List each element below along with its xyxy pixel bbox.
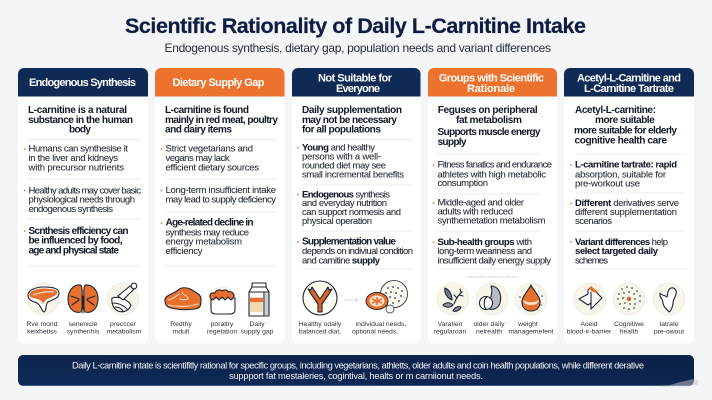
icon labels: blood-ir-barrier — [567, 328, 612, 336]
icon labels: health — [620, 328, 638, 336]
panel heading: Groups with Scientific — [439, 72, 544, 84]
panel heading — [564, 68, 694, 96]
intro text: for all populations — [302, 125, 381, 136]
intro text: Acetyl-L-carnitine: — [575, 105, 656, 116]
icon labels — [299, 321, 406, 336]
bullet list: in the liver and kidneys — [28, 153, 118, 164]
intro text: supply — [438, 137, 467, 148]
bullet list: Scnthesis efficiency can — [28, 226, 128, 237]
bullet list: persons with a well- — [302, 152, 381, 162]
intro text: more suitable — [595, 115, 655, 126]
panel heading: Dietary Supply Gap — [172, 77, 265, 89]
icon: steak — [27, 283, 59, 315]
panel heading: Rationale — [467, 83, 515, 95]
icon labels: optional needs, — [352, 328, 398, 336]
bullet list: be influenced by food, — [28, 236, 123, 246]
bullet list: Different derivatives serve — [575, 198, 679, 209]
panel heading — [292, 68, 420, 96]
bullet list: synthesis may reduce — [166, 227, 249, 238]
icon: individual needs — [366, 280, 408, 313]
bullet list: scenarios — [575, 216, 612, 227]
icon: balanced diet — [303, 281, 337, 315]
intro text: substance in the human — [28, 115, 133, 126]
icon: older adult — [476, 283, 508, 315]
icon labels: metabolism — [107, 328, 142, 336]
bullet list: age and physical state — [28, 245, 119, 256]
bullet list: efficient dietary sources — [166, 163, 259, 174]
icon labels: balanced diat, — [299, 328, 341, 336]
arrow — [344, 298, 358, 302]
panel: dietary supply gap — [155, 68, 284, 344]
icon labels: pre-owout — [654, 328, 684, 336]
icon labels: supply gap — [241, 328, 274, 336]
bullet list: physiological needs through — [28, 195, 135, 206]
bullet list: Middle-aged and older — [438, 197, 524, 208]
bullet list — [433, 160, 552, 266]
bullet list: with precursor nutrients — [28, 163, 124, 174]
bullet list: select targeted daily — [575, 246, 659, 257]
bullet list: long-term weariness and — [438, 246, 532, 257]
intro text: Feguses on peripheral — [438, 105, 538, 116]
bullet list: rounded diet may see — [302, 160, 386, 171]
bullet list: may lead to supply deficiency — [166, 195, 276, 206]
icon labels: weight — [517, 321, 538, 328]
bullet list: vegans may lack — [166, 153, 230, 164]
intro text — [438, 105, 541, 148]
icon labels: precccer — [110, 321, 137, 328]
bullet list: schemes — [575, 255, 608, 266]
panel: acetyl-l-carnitine and tartrate — [564, 68, 694, 344]
subtitle: Endogenous synthesis, dietary gap, population needs and variant differences — [164, 41, 551, 55]
icon: weight drop — [515, 283, 547, 315]
icon labels: older daily — [474, 321, 505, 328]
intro text: fat metabolism — [456, 115, 522, 126]
bullet list: Strict vegetarians and — [166, 144, 253, 155]
icon labels: senenicle — [69, 321, 98, 328]
bullet list: endogenous synthesis — [28, 204, 113, 215]
bullet list — [24, 144, 141, 256]
footer banner — [18, 355, 694, 386]
faint caption: customised wellness trained — [467, 275, 517, 279]
intro text — [574, 105, 677, 146]
title: Scientific Rationality of Daily L-Carnitine Intake — [125, 14, 586, 38]
icon: leaves — [437, 283, 469, 315]
icon: kidneys — [68, 285, 98, 313]
icon labels — [567, 321, 684, 336]
icon labels: mdult — [173, 328, 189, 336]
bullet list: Variant differences help — [575, 237, 668, 248]
bullet list — [297, 143, 413, 266]
icon labels: Rve mond — [27, 321, 58, 328]
icon labels: Daily — [249, 321, 265, 328]
panel heading: Everyone — [336, 83, 380, 95]
icon labels: nelrealth — [476, 328, 502, 336]
icon: cognitive dots — [613, 283, 645, 315]
bullet list — [161, 144, 276, 257]
panel heading: Endogenous Synthesis — [29, 77, 136, 89]
intro text — [302, 105, 402, 136]
panel heading — [428, 68, 557, 96]
intro text: Supports muscle energy — [438, 127, 541, 138]
bullet list: can support normesis and — [302, 207, 401, 218]
bullet list: depends on indiviual condition — [302, 246, 413, 257]
bullet list: and carnitine supply — [302, 255, 381, 266]
intro text — [165, 105, 278, 136]
panel: not suitable for everyone — [292, 68, 420, 344]
bullet list: Age-related decline in — [166, 217, 254, 228]
icon labels: individual needs, — [356, 321, 406, 328]
bullet list: L-carnitine tartrate: rapid — [575, 160, 677, 171]
icon labels: regularoan — [434, 328, 466, 336]
bullet list: energy metabolism — [166, 237, 242, 248]
icon: milk carton — [249, 283, 269, 316]
panel: endogenous synthesis — [18, 68, 148, 344]
bullet list: athletes with high metabolic — [438, 169, 546, 180]
icon labels: Cognitiwe — [614, 321, 644, 328]
bullet list: insufficient daily energy supply — [438, 255, 551, 266]
icon labels: tatrate — [659, 321, 679, 328]
icon labels — [434, 321, 554, 336]
icon: mortar and pestle — [107, 283, 139, 315]
bullet list: Young and healthy — [302, 143, 375, 154]
bullet list: Long-term insufficient intake — [166, 185, 276, 196]
panel heading: L-Carnitine Tartrate — [584, 83, 674, 95]
bullet list: pre-workout use — [575, 178, 640, 189]
icon labels: managemefent — [508, 328, 554, 336]
intro text: body — [69, 125, 91, 136]
bullet list — [570, 160, 679, 266]
panel heading: Acetyl-L-Carnitine and — [577, 72, 681, 84]
icon labels — [27, 321, 142, 336]
intro text: cognitive health care — [574, 136, 667, 146]
icon labels — [170, 321, 274, 336]
intro text: Daily supplementation — [302, 105, 402, 116]
bullet list: Supplementation value — [302, 237, 396, 248]
bullet list: Fitness fanatics and endurance — [438, 160, 552, 171]
icon labels: Healthy odaily — [299, 321, 342, 328]
icon labels: synthenhis — [67, 328, 100, 336]
bullet list: Humans can synthesise it — [28, 144, 128, 155]
intro text: more suitable for elderly — [574, 126, 677, 136]
bullet list: efficiency — [166, 246, 203, 257]
intro text: L-carnitine is found — [165, 105, 249, 116]
panel heading: Not Suitable for — [318, 72, 393, 84]
bullet list: absorption, suitable for — [575, 169, 666, 180]
intro text: and dairy items — [165, 125, 232, 136]
panel: groups with scientific rationale — [428, 68, 557, 344]
icon labels: keixhetiss — [27, 328, 58, 336]
bullet list: physical operation — [302, 216, 372, 227]
bullet list: consumption — [438, 178, 488, 189]
icon labels: regetation — [207, 328, 237, 336]
icon labels: Varatien — [438, 321, 463, 328]
bullet list: different supplementation — [575, 207, 677, 218]
footer banner: suppport fat mestaleries, cogintival, healts or m carniionut needs. — [229, 371, 483, 381]
panel heading — [155, 68, 284, 96]
panel heading — [18, 68, 148, 96]
icon labels: Redthy — [170, 321, 192, 328]
bullet list: Sub-health groups with — [438, 237, 532, 248]
icon: blood-brain barrier — [574, 283, 606, 315]
icon labels: Aceid — [580, 321, 598, 328]
icon: red meat — [165, 288, 201, 310]
icon: tartrate — [653, 283, 685, 315]
footer banner: Daily L-carnitine intate is scientifitly rational for specific groups, including vegetarians, athletts, older adults and coin health populations, while different derative — [72, 361, 644, 371]
intro text: may not be necessary — [302, 115, 397, 126]
bullet list: Healthy adults may cover basic — [28, 185, 141, 196]
bullet list: small incremental benefits — [302, 170, 404, 181]
bullet list: Endogenous synthesis — [302, 189, 390, 200]
icon labels: poraltry — [211, 321, 234, 328]
intro text: L-carnitine is a natural — [28, 105, 127, 116]
bullet list: and everyday nutrition — [302, 198, 387, 209]
bullet list: synthemetation metabolism — [438, 215, 546, 226]
intro text — [28, 105, 133, 136]
icon: poultry pot — [209, 287, 235, 314]
intro text: mainly in red meat, poultry — [165, 115, 278, 126]
bullet list: adults with reduced — [438, 206, 513, 217]
